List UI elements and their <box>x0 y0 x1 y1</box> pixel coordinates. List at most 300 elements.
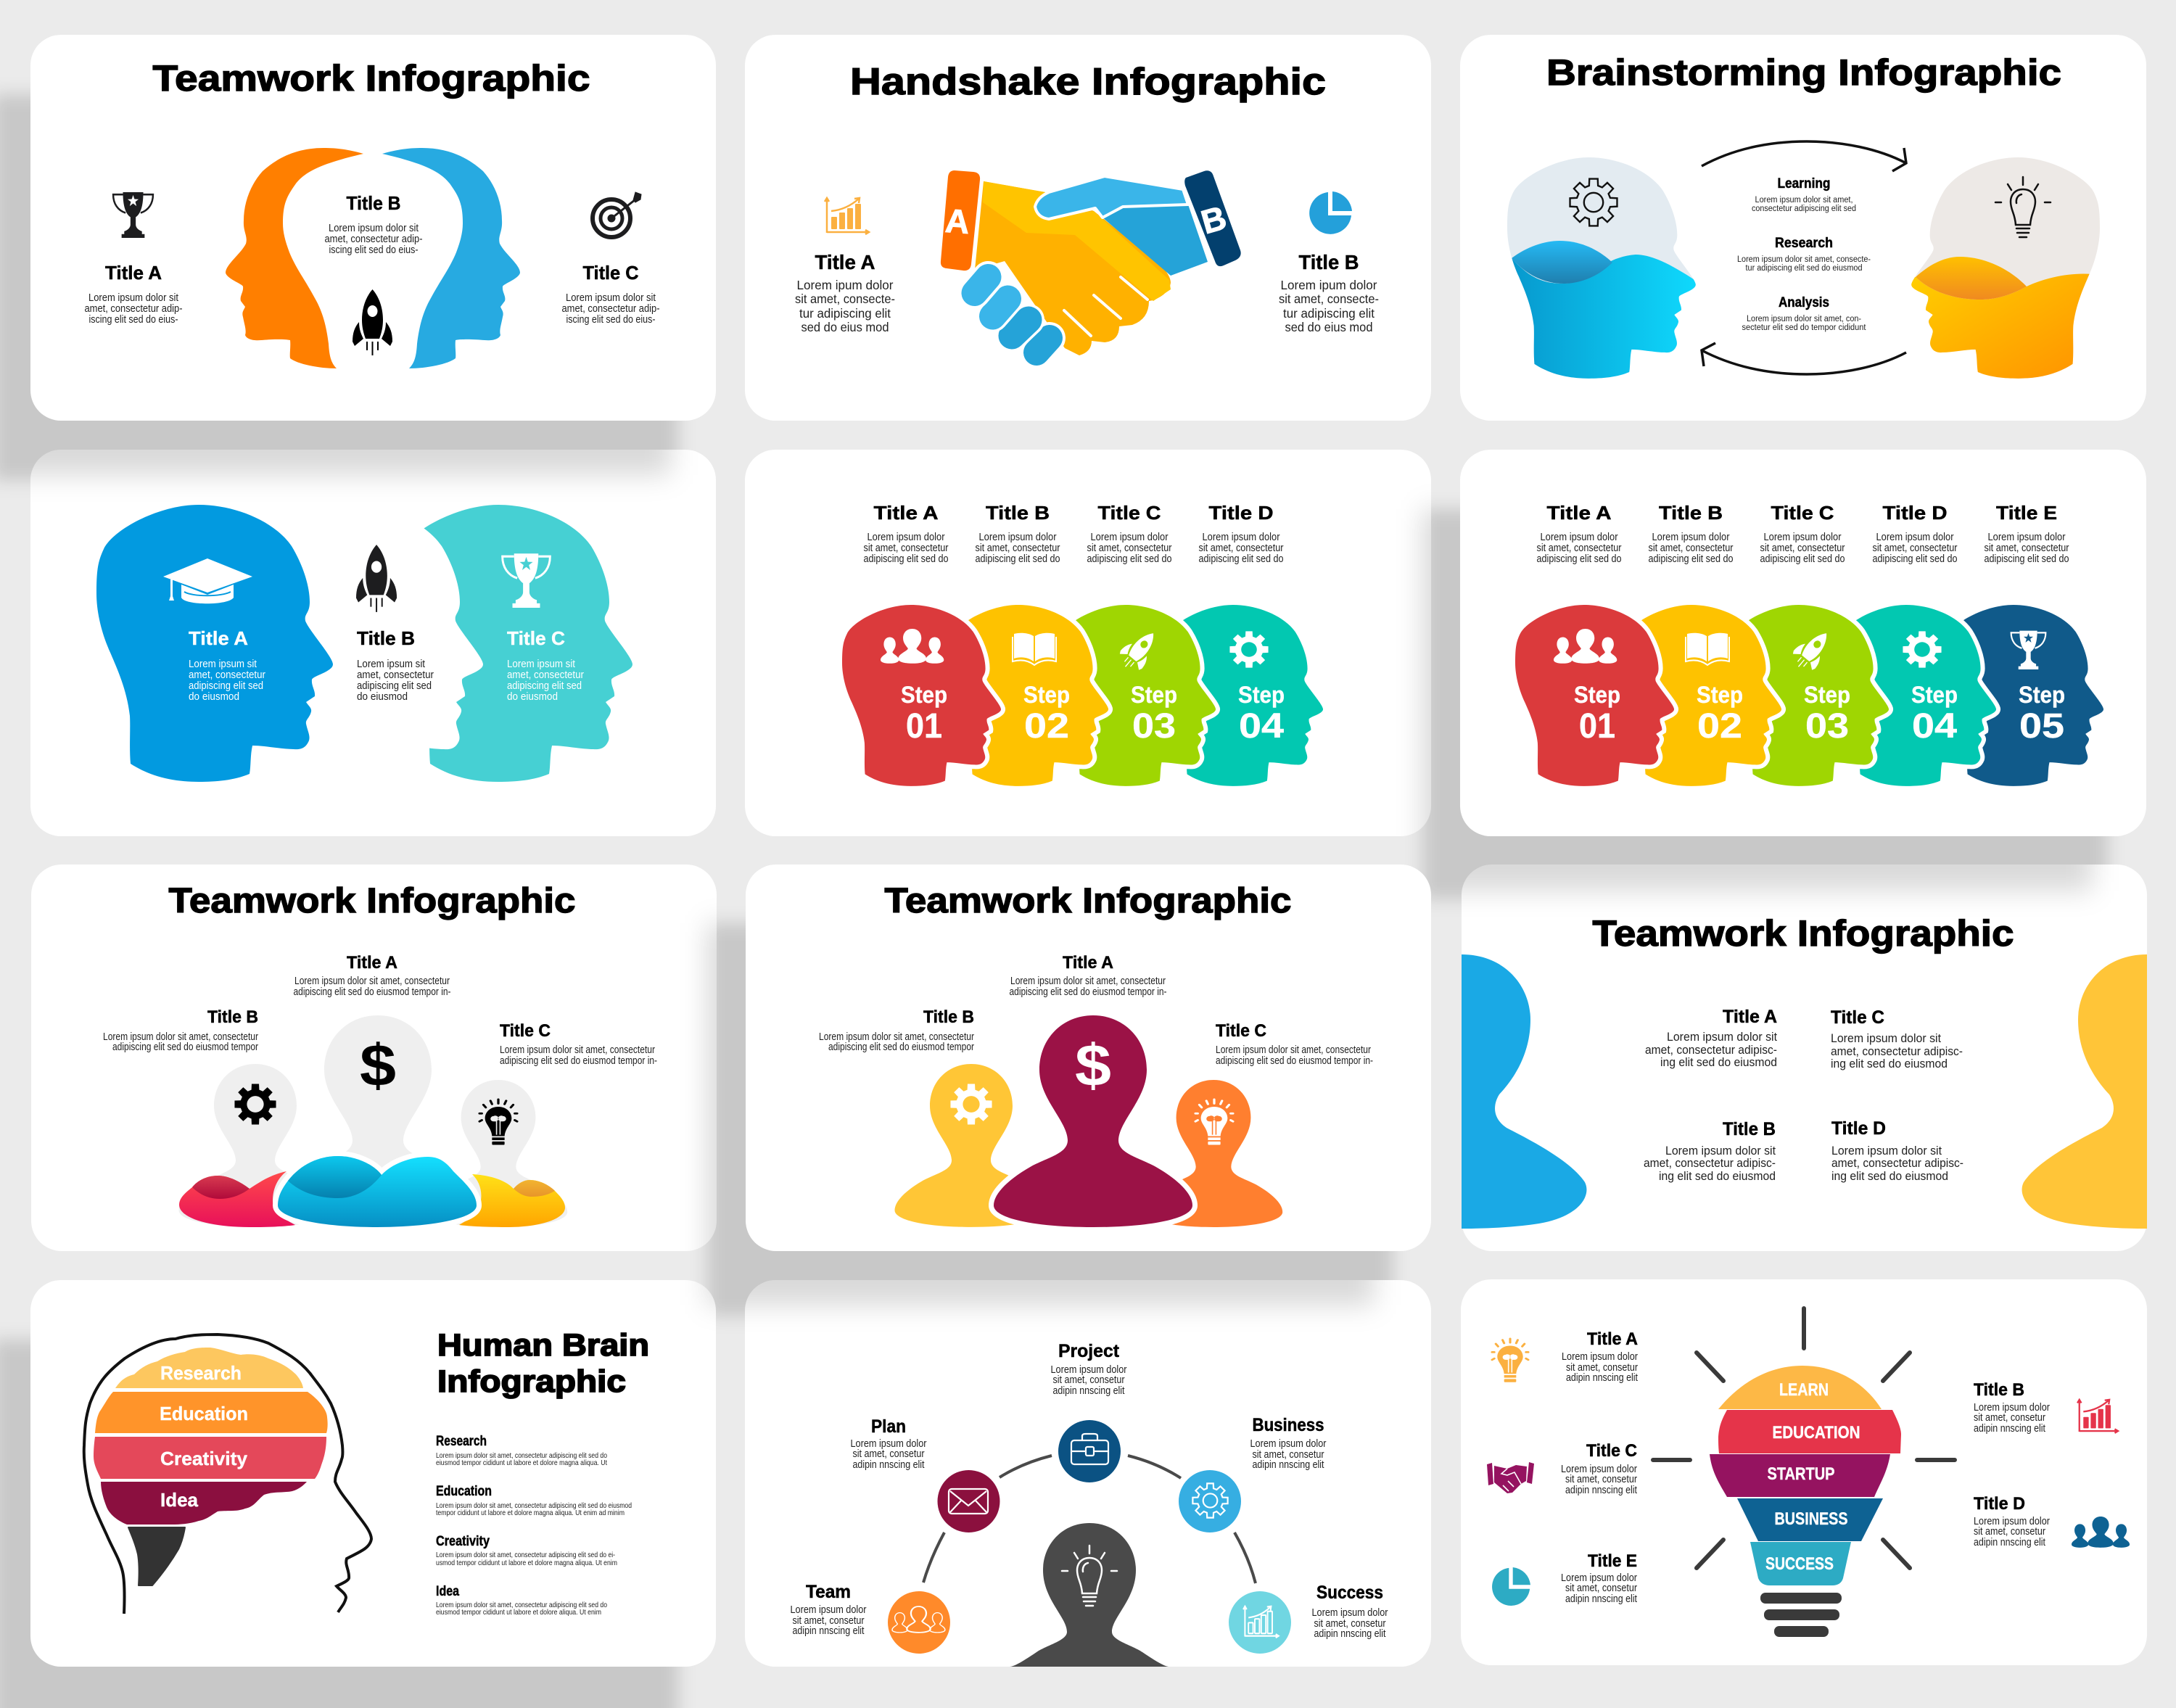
step labels: 02 <box>1024 707 1069 746</box>
column titles and copy: sit amet, consectetur <box>1087 542 1172 554</box>
copy: sit amet, consetur <box>1974 1526 2045 1538</box>
copy: Lorem ipsum dolor <box>1974 1402 2050 1414</box>
text: title C: Lorem ipsum sit <box>507 659 575 670</box>
copy: amet, consectetur adip- <box>84 303 183 315</box>
copy: adipiscing elit sed do eiusmod tempor <box>112 1041 258 1053</box>
head: step 04 <box>1837 605 1996 786</box>
copy: adipiscing elit sed do eiusmod tempor <box>828 1041 974 1053</box>
node labels: Success <box>1316 1583 1383 1603</box>
copy: Title C <box>500 1021 551 1041</box>
copy: Title B <box>1723 1119 1776 1139</box>
yellow figure body <box>459 1174 565 1227</box>
brain copy: Idea <box>436 1584 459 1599</box>
heading: Handshake Infographic <box>850 61 1326 103</box>
copy: adipin nnscing elit <box>1974 1537 2045 1548</box>
column titles and copy: Lorem ipsum dolor <box>1987 532 2066 543</box>
copy: amet, consectetur adip- <box>325 234 423 245</box>
node labels: Team <box>806 1582 851 1602</box>
orange figure <box>1145 1080 1282 1227</box>
copy: Lorem ipsum dolor sit <box>566 292 656 304</box>
copy: tur adipiscing elit <box>1283 306 1375 321</box>
icon: graduation cap <box>163 558 252 603</box>
column titles and copy: Lorem ipsum dolor <box>1876 532 1954 543</box>
brain copy <box>436 1434 632 1617</box>
node labels <box>791 1341 1388 1640</box>
column titles and copy: sit amet, consectetur <box>1198 542 1284 554</box>
column titles and copy: sit amet, consectetur <box>1648 542 1734 554</box>
copy: tur adipiscing elit <box>799 306 891 321</box>
column titles and copy: Lorem ipsum dolor <box>1764 532 1842 543</box>
brain labels: Research <box>160 1362 242 1384</box>
copy: amet, consectetur adipisc- <box>1831 1044 1963 1058</box>
panel: teamwork twin heads <box>30 35 716 421</box>
icon: people <box>2072 1517 2130 1548</box>
icon: gear <box>1570 179 1617 226</box>
copy: sit amet, consecte- <box>795 292 895 306</box>
bulb rays <box>1653 1308 1955 1568</box>
cerebellum <box>128 1527 185 1585</box>
right yellow silhouette <box>2022 954 2147 1229</box>
copy: Lorem ipum dolor <box>1281 278 1377 292</box>
panel: handshake <box>745 35 1431 421</box>
copy: Lorem ipsum dolor sit <box>1665 1144 1776 1158</box>
icon: rocket <box>356 545 397 612</box>
column titles and copy: adipiscing elit sed do <box>1985 553 2069 565</box>
brain labels: Idea <box>160 1489 199 1511</box>
column titles and copy: Lorem ipsum dolor <box>1203 532 1280 543</box>
copy: iscing elit sed do eius- <box>329 244 419 256</box>
copy: Lorem ipsum dolor sit amet, consectetur <box>500 1044 655 1056</box>
brain copy: Education <box>436 1484 492 1499</box>
brain copy: Lorem ipsum dolor sit amet, consectetur adipiscing elit sed do ei- <box>436 1551 615 1559</box>
heading: Teamwork Infographic <box>152 58 590 99</box>
node labels: sit amet, consetur <box>1252 1449 1324 1461</box>
copy: Analysis <box>1779 295 1829 310</box>
column titles and copy: Title E <box>1996 502 2057 524</box>
copy: amet, consectetur adipisc- <box>1831 1156 1963 1170</box>
text: title B <box>357 627 434 703</box>
step labels: 04 <box>1239 707 1284 746</box>
copy: amet, consectetur adipisc- <box>1645 1043 1777 1057</box>
column titles and copy: Lorem ipsum dolor <box>867 532 945 543</box>
copy: Title B <box>347 192 400 214</box>
copy: Title D <box>1974 1494 2025 1514</box>
copy: amet, consectetur adip- <box>561 303 660 315</box>
brain copy: usmod tempor cididunt ut labore et dolore magna aliqua. Ut enim <box>436 1559 617 1567</box>
heading: Infographic <box>437 1364 626 1399</box>
bulb segment: business <box>1737 1498 1883 1541</box>
node labels: Plan <box>871 1416 906 1437</box>
icon: book <box>1013 633 1056 665</box>
column titles and copy: Title A <box>873 502 939 524</box>
copy: Title A <box>347 953 397 973</box>
heading: Teamwork Infographic <box>168 882 576 920</box>
segment labels <box>1765 1380 1860 1574</box>
node labels: adipin nnscing elit <box>1053 1385 1124 1397</box>
bulb segment: learn <box>1718 1366 1882 1409</box>
copy: Learning <box>1777 176 1831 191</box>
copy: adipiscing elit sed do eiusmod tempor in- <box>500 1055 657 1067</box>
node labels: Business <box>1252 1415 1324 1435</box>
text: title B: amet, consectetur <box>357 669 434 681</box>
copy: Lorem ipsum dolor sit amet, consectetur <box>1010 975 1166 987</box>
copy: adipin nnscing elit <box>1565 1593 1637 1605</box>
head: step 04 <box>1164 605 1323 786</box>
step labels: 03 <box>1132 707 1176 746</box>
copy: Title C <box>1586 1441 1637 1461</box>
node labels: Lorem ipsum dolor <box>791 1604 867 1616</box>
step labels <box>1574 682 2065 746</box>
panel: light bulb <box>1461 1279 2147 1665</box>
column titles and copy: Title A <box>1546 502 1612 524</box>
node labels: adipin nnscing elit <box>853 1459 924 1471</box>
copy: sit amet, consetur <box>1565 1583 1637 1594</box>
copy: Title C <box>583 262 639 284</box>
copy <box>1561 1329 2050 1605</box>
brain copy: Lorem ipsum dolor sit amet, consectetur adipiscing elit sed do <box>436 1601 607 1609</box>
step labels: 05 <box>2019 707 2064 746</box>
column titles and copy: sit amet, consectetur <box>1873 542 1958 554</box>
copy: iscing elit sed do eius- <box>566 314 656 326</box>
copy: sit amet, consecte- <box>1279 292 1379 306</box>
copy: consectetur adipiscing elit sed <box>1752 205 1856 213</box>
brain band: education <box>95 1392 328 1433</box>
arrow: top <box>1702 141 1906 171</box>
left head <box>1501 157 1705 384</box>
column titles and copy: adipiscing elit sed do <box>1087 553 1172 565</box>
copy: Title B <box>207 1007 258 1027</box>
copy: sit amet, consetur <box>1565 1474 1637 1485</box>
copy: sit amet, consetur <box>1566 1362 1638 1374</box>
copy: ing elit sed do eiusmod <box>1660 1055 1777 1069</box>
icon: trophy <box>113 192 153 238</box>
heading: Teamwork Infographic <box>1593 913 2014 954</box>
step labels: 01 <box>906 707 942 746</box>
head outline <box>84 1334 371 1614</box>
icon: gear <box>950 1084 992 1125</box>
node labels: sit amet, consetur <box>1053 1374 1125 1386</box>
copy: sit amet, consetur <box>1974 1412 2045 1424</box>
column titles and copy <box>863 502 1284 565</box>
icon: light bulb <box>479 1100 517 1144</box>
column titles and copy: Lorem ipsum dolor <box>1091 532 1169 543</box>
copy: ing elit sed do eiusmod <box>1659 1169 1776 1183</box>
step labels: 04 <box>1912 707 1957 746</box>
negative face cut-out <box>247 505 483 782</box>
copy: Title A <box>1063 953 1113 973</box>
text: title C: adipiscing elit sed <box>507 680 582 692</box>
brain copy: eiusmod tempor cididunt ut labore et dolore aliqua. Ut enim <box>436 1608 601 1617</box>
icon: dollar: $ <box>360 1033 396 1099</box>
column titles and copy: sit amet, consectetur <box>1985 542 2069 554</box>
copy: Lorem ipsum dolor sit amet, con- <box>1747 315 1861 323</box>
column titles and copy: Title B <box>986 502 1050 524</box>
node labels: Lorem ipsum dolor <box>1311 1607 1388 1619</box>
grey figures <box>179 1015 567 1227</box>
column titles and copy: adipiscing elit sed do <box>1648 553 1734 565</box>
icon: book <box>1686 633 1729 665</box>
yellow figure <box>895 1064 1047 1227</box>
icon: light bulb <box>1062 1546 1117 1606</box>
brain labels: Creativity <box>160 1448 248 1469</box>
text: title B: Lorem ipsum sit <box>357 659 425 670</box>
panel: project arc <box>745 1280 1431 1667</box>
copy: adipiscing elit sed do eiusmod tempor in- <box>1010 986 1167 998</box>
step labels: 02 <box>1697 707 1742 746</box>
left blue silhouette <box>1462 954 1586 1229</box>
cuff A: A <box>944 202 970 241</box>
panel: four step heads <box>745 450 1431 836</box>
icon: gear <box>1229 631 1269 668</box>
node: business <box>1179 1470 1241 1532</box>
text: title A <box>189 627 265 703</box>
orange head <box>226 148 363 368</box>
panel: human brain <box>30 1280 716 1667</box>
copy: ing elit sed do eiusmod <box>1831 1057 1948 1070</box>
copy <box>1737 176 1871 332</box>
copy: Lorem ipsum dolor <box>1562 1351 1638 1363</box>
brain copy: eiusmod tempor cididunt ut labore et dolore magna aliqua. Ut <box>436 1459 607 1467</box>
connecting arcs <box>923 1456 1256 1583</box>
column titles and copy: Title C <box>1771 502 1834 524</box>
node labels: sit amet, consetur <box>853 1448 925 1460</box>
brain band: research <box>115 1348 303 1388</box>
heading: Teamwork Infographic <box>885 882 1291 920</box>
node: plan <box>937 1470 1000 1532</box>
node labels: sit amet, consetur <box>792 1615 865 1627</box>
heading: Brainstorming Infographic <box>1546 52 2061 93</box>
panel: teamwork side silhouettes <box>1462 865 2147 1251</box>
text: title C: Title C <box>507 627 565 649</box>
copy <box>819 953 1373 1067</box>
node labels: Lorem ipsum dolor <box>1250 1438 1327 1450</box>
text: title B: Title B <box>357 627 415 649</box>
brain copy: Creativity <box>436 1534 490 1549</box>
copy <box>1644 1007 1963 1183</box>
copy: Lorem ipsum dolor <box>1561 1572 1637 1584</box>
heading <box>437 1328 649 1399</box>
head: step 02 <box>949 605 1108 786</box>
text: title A: amet, consectetur <box>189 669 265 681</box>
icon: light bulb <box>1995 177 2051 237</box>
copy: Lorem ipsum dolor sit amet, consectetur <box>294 975 450 987</box>
copy: Title A <box>105 262 162 284</box>
icon: chart <box>2077 1400 2118 1433</box>
copy: Lorem ipsum dolor sit amet, <box>1755 196 1853 205</box>
cuff A <box>941 170 980 271</box>
icon: people <box>881 629 944 664</box>
icon: trophy <box>2011 631 2045 669</box>
hand A <box>975 181 1171 355</box>
copy: Lorem ipsum dolor sit <box>1667 1030 1777 1044</box>
step labels: 03 <box>1805 707 1849 746</box>
copy: Title C <box>1831 1007 1884 1028</box>
icon: target <box>593 192 641 237</box>
teal head <box>396 505 632 782</box>
copy: Title A <box>1723 1007 1777 1027</box>
icon: gear <box>234 1084 276 1125</box>
text: title A: adipiscing elit sed <box>189 680 263 692</box>
heading: Human Brain <box>437 1328 649 1363</box>
brain copy: Lorem ipsum dolor sit amet, consectetur adipiscing elit sed do eiusmod <box>436 1501 632 1510</box>
icon: rocket <box>1788 624 1837 676</box>
cuff B: B <box>1197 198 1230 242</box>
step labels: Step <box>901 682 947 708</box>
fingers <box>975 277 1050 352</box>
column titles and copy: Title C <box>1098 502 1161 524</box>
copy: Lorem ipsum dolor sit <box>88 292 178 304</box>
hand B <box>1035 176 1208 276</box>
copy: Title E <box>1588 1551 1637 1571</box>
copy: Lorem ipsum dolor sit amet, consectetur <box>819 1031 974 1043</box>
text: title B: adipiscing elit sed <box>357 680 432 692</box>
text: title C <box>507 627 584 703</box>
column titles and copy: Lorem ipsum dolor <box>1652 532 1730 543</box>
column titles and copy: sit amet, consectetur <box>1536 542 1622 554</box>
copy: Lorem ipsum dolor sit amet, consecte- <box>1737 255 1871 264</box>
column titles and copy: adipiscing elit sed do <box>975 553 1060 565</box>
panel: two-head profile infographic <box>30 450 716 836</box>
column titles and copy: Title D <box>1208 502 1274 524</box>
column titles and copy: Title D <box>1883 502 1947 524</box>
column titles and copy: adipiscing elit sed do <box>1198 553 1284 565</box>
copy: Title B <box>923 1007 974 1027</box>
cuff B <box>1184 170 1241 266</box>
head: step 02 <box>1623 605 1781 786</box>
column titles and copy: sit amet, consectetur <box>975 542 1060 554</box>
copy: Title B <box>1974 1380 2024 1400</box>
segment labels: EDUCATION <box>1773 1423 1860 1443</box>
right head <box>1904 157 2100 384</box>
text: title A: do eiusmod <box>189 691 239 703</box>
copy: Lorem ipsum dolor <box>1974 1516 2050 1527</box>
icon: bulb <box>1492 1339 1528 1382</box>
copy: tur adipiscing elit sed do eiusmod <box>1745 264 1863 273</box>
node labels: adipin nnscing elit <box>1252 1459 1324 1471</box>
step labels: 01 <box>1579 707 1615 746</box>
bulb segment: education <box>1718 1410 1901 1453</box>
column titles and copy: Title B <box>1659 502 1723 524</box>
node labels: Lorem ipsum dolor <box>850 1438 927 1450</box>
icon: gear <box>1903 631 1942 668</box>
node: success <box>1229 1591 1291 1654</box>
node: project <box>1058 1420 1121 1482</box>
node labels: adipin nnscing elit <box>1314 1628 1385 1640</box>
shadow fades cast across neighbouring cards <box>30 450 2102 1316</box>
panel: teamwork gradient figures <box>31 865 717 1251</box>
brain copy: Lorem ipsum dolor sit amet, consectetur adipiscing elit sed do <box>436 1451 607 1460</box>
icon: handshake <box>1487 1462 1534 1493</box>
step labels: Step <box>1911 682 1958 708</box>
brain band: creativity <box>94 1437 326 1479</box>
icon: pie <box>1492 1567 1530 1606</box>
text: title C: amet, consectetur <box>507 669 584 681</box>
copy: amet, consectetur adipisc- <box>1644 1156 1776 1170</box>
copy: Title A <box>1587 1329 1638 1349</box>
copy <box>795 251 1379 334</box>
column titles and copy: adipiscing elit sed do <box>1873 553 1957 565</box>
segment labels: LEARN <box>1779 1380 1829 1400</box>
segment labels: STARTUP <box>1767 1464 1835 1484</box>
icon: rocket <box>1115 624 1164 676</box>
head: step 05 <box>1945 605 2103 786</box>
column titles and copy: sit amet, consectetur <box>863 542 949 554</box>
icon: trophy <box>503 553 550 608</box>
blue head <box>96 505 333 782</box>
segment labels: SUCCESS <box>1765 1554 1834 1574</box>
copy: Title B <box>1298 251 1359 273</box>
copy: Title A <box>815 251 875 273</box>
column titles and copy: Lorem ipsum dolor <box>1541 532 1618 543</box>
node: team <box>888 1591 950 1654</box>
brain labels: Education <box>160 1403 248 1424</box>
column titles and copy <box>1536 502 2069 565</box>
copy: Title D <box>1831 1118 1886 1139</box>
icon: light bulb <box>1195 1100 1233 1144</box>
bulb segment: startup <box>1710 1454 1890 1497</box>
step labels: Step <box>1574 682 1620 708</box>
icon: people <box>1554 629 1617 664</box>
copy: iscing elit sed do eius- <box>88 314 178 326</box>
copy: Lorem ipsum dolor sit <box>1831 1031 1941 1045</box>
copy: sed do eius mod <box>1285 320 1372 334</box>
node labels: Lorem ipsum dolor <box>1050 1364 1127 1376</box>
panel: brainstorming <box>1460 35 2146 421</box>
brain copy: Research <box>436 1434 487 1449</box>
node labels: sit amet, consetur <box>1314 1618 1386 1630</box>
step labels: Step <box>1697 682 1743 708</box>
text: title C: do eiusmod <box>507 691 558 703</box>
icon: dollar: $ <box>1075 1033 1111 1099</box>
step labels <box>901 682 1285 746</box>
copy: Title C <box>1216 1021 1266 1041</box>
copy: Lorem ipsum dolor sit amet, consectetur <box>1216 1044 1371 1056</box>
brain labels <box>160 1362 248 1511</box>
text: title A: Lorem ipsum sit <box>189 659 257 670</box>
column titles and copy: adipiscing elit sed do <box>1536 553 1622 565</box>
bulb base <box>1760 1593 1842 1637</box>
panel: five step heads <box>1460 450 2146 836</box>
copy: sed do eius mod <box>801 320 889 334</box>
copy: ing elit sed do eiusmod <box>1831 1169 1948 1183</box>
head: step 01 <box>842 605 1001 786</box>
head: step 03 <box>1057 605 1216 786</box>
copy: adipiscing elit sed do eiusmod tempor in- <box>293 986 451 998</box>
blue head <box>382 148 520 368</box>
text: title B: do eiusmod <box>357 691 408 703</box>
copy <box>103 953 657 1067</box>
bulb segment: success <box>1750 1542 1851 1585</box>
copy: adipin nnscing elit <box>1974 1423 2045 1435</box>
copy: Lorem ipum dolor <box>796 278 894 292</box>
step labels: Step <box>2019 682 2065 708</box>
copy: adipin nnscing elit <box>1565 1485 1637 1496</box>
column titles and copy: adipiscing elit sed do <box>1760 553 1845 565</box>
copy: Lorem ipsum dolor sit <box>329 223 419 234</box>
column titles and copy: Lorem ipsum dolor <box>979 532 1057 543</box>
copy: Lorem ipsum dolor sit <box>1831 1144 1942 1158</box>
copy: Lorem ipsum dolor <box>1561 1464 1637 1475</box>
arrow: bottom <box>1702 343 1906 374</box>
step labels: Step <box>1804 682 1850 708</box>
copy: sectetur elit sed do tempor cididunt <box>1742 323 1866 332</box>
copy: adipin nnscing elit <box>1566 1372 1638 1384</box>
copy: Lorem ipsum dolor sit amet, consectetur <box>103 1031 258 1043</box>
node labels: adipin nnscing elit <box>792 1625 865 1637</box>
brain copy: tempor cididunt ut labore et dolore magna aliqua. Ut enim ad minim <box>436 1509 625 1517</box>
segment labels: BUSINESS <box>1774 1509 1848 1529</box>
step labels: Step <box>1023 682 1070 708</box>
